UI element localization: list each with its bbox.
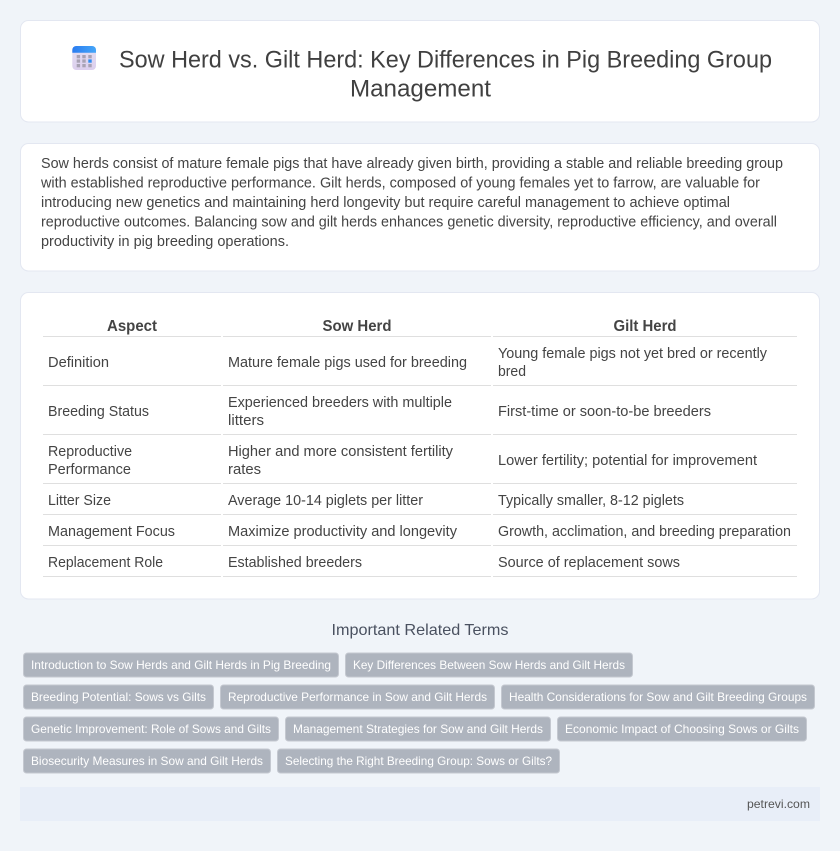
tag: Breeding Potential: Sows vs Gilts (31, 690, 206, 704)
row: reproductive performance (48, 444, 757, 478)
row: litter size: Typically smaller, 8-12 piglets (498, 493, 684, 509)
table header: Gilt Herd (614, 318, 676, 335)
row: breeding status (48, 395, 711, 429)
row: breeding status: Breeding Status (48, 404, 149, 420)
panel: introduction text: productivity in pig breeding operations. (41, 234, 289, 250)
row: management focus: Maximize productivity and longevity (228, 524, 458, 540)
tag: Selecting the Right Breeding Group: Sows or Gilts? (285, 754, 552, 768)
row: litter size: Average 10-14 piglets per litter (228, 493, 423, 509)
table header: Sow Herd (322, 318, 392, 335)
row: management focus (48, 524, 791, 540)
row: breeding status: Experienced breeders with multiple (228, 395, 452, 411)
tag (502, 685, 814, 709)
row: reproductive performance: Performance (48, 462, 131, 478)
tag (286, 717, 550, 741)
row: replacement role (48, 555, 680, 571)
row: replacement role: Replacement Role (48, 555, 163, 571)
panel: introduction text: Sow herds consist of mature female pigs that have already given birth, providing a stable and reliable breeding group (41, 156, 783, 172)
row: breeding status: First-time or soon-to-be breeders (498, 404, 711, 420)
title: Management (350, 76, 491, 102)
heading: important related terms: Important Related Terms (332, 622, 508, 639)
tag: Introduction to Sow Herds and Gilt Herds in Pig Breeding (31, 658, 331, 672)
tag: Management Strategies for Sow and Gilt Herds (293, 722, 543, 736)
row: reproductive performance: Lower fertility; potential for improvement (498, 453, 757, 469)
tag: Key Differences Between Sow Herds and Gilt Herds (353, 658, 625, 672)
row: reproductive performance: Higher and more consistent fertility (228, 444, 454, 460)
table header (107, 318, 676, 335)
row: management focus: Management Focus (48, 524, 175, 540)
tag (24, 685, 214, 709)
row: definition: bred (498, 364, 526, 380)
tag: Economic Impact of Choosing Sows or Gilts (565, 722, 799, 736)
tag (24, 749, 270, 773)
panel: introduction text: reproductive outcomes. Balancing sow and gilt herds enhances genetic diversity, reproductive efficiency, and overall (41, 214, 777, 230)
tag (346, 653, 632, 677)
panel: comparison table (20, 292, 820, 599)
tag (220, 685, 494, 709)
row: reproductive performance: rates (228, 462, 261, 478)
tag: Health Considerations for Sow and Gilt Breeding Groups (509, 690, 807, 704)
row: management focus: Growth, acclimation, and breeding preparation (498, 524, 791, 540)
row: definition (48, 346, 768, 380)
tag: Genetic Improvement: Role of Sows and Gilts (31, 722, 271, 736)
panel: introduction text: with established reproductive performance. Gilt herds, composed of young females yet to farrow, are valuable for (40, 176, 760, 192)
panel: title header (20, 20, 820, 122)
tag (24, 717, 278, 741)
title (119, 46, 772, 102)
row: definition: Definition (48, 355, 109, 371)
row: litter size (48, 493, 684, 509)
table header: Aspect (107, 318, 157, 335)
row: definition: Young female pigs not yet bred or recently (498, 346, 768, 362)
footer (20, 787, 820, 821)
row: breeding status: litters (228, 413, 264, 429)
row: reproductive performance: Reproductive (48, 444, 132, 460)
icon: calendar (72, 46, 96, 70)
title: Sow Herd vs. Gilt Herd: Key Differences in Pig Breeding Group (119, 46, 772, 74)
tag (558, 717, 806, 741)
tag (278, 749, 560, 773)
related term tags (24, 653, 814, 773)
panel: introduction text: introducing new genetics and maintaining herd longevity but require careful management to achieve optimal (41, 195, 730, 211)
footer: petrevi.com (747, 797, 810, 811)
panel: introduction text (20, 144, 820, 271)
row: definition: Mature female pigs used for breeding (228, 355, 467, 371)
tag: Biosecurity Measures in Sow and Gilt Herds (31, 754, 263, 768)
tag: Reproductive Performance in Sow and Gilt Herds (228, 690, 487, 704)
row: litter size: Litter Size (48, 493, 111, 509)
tag (24, 653, 338, 677)
row: replacement role: Established breeders (228, 555, 362, 571)
row: replacement role: Source of replacement sows (498, 555, 680, 571)
